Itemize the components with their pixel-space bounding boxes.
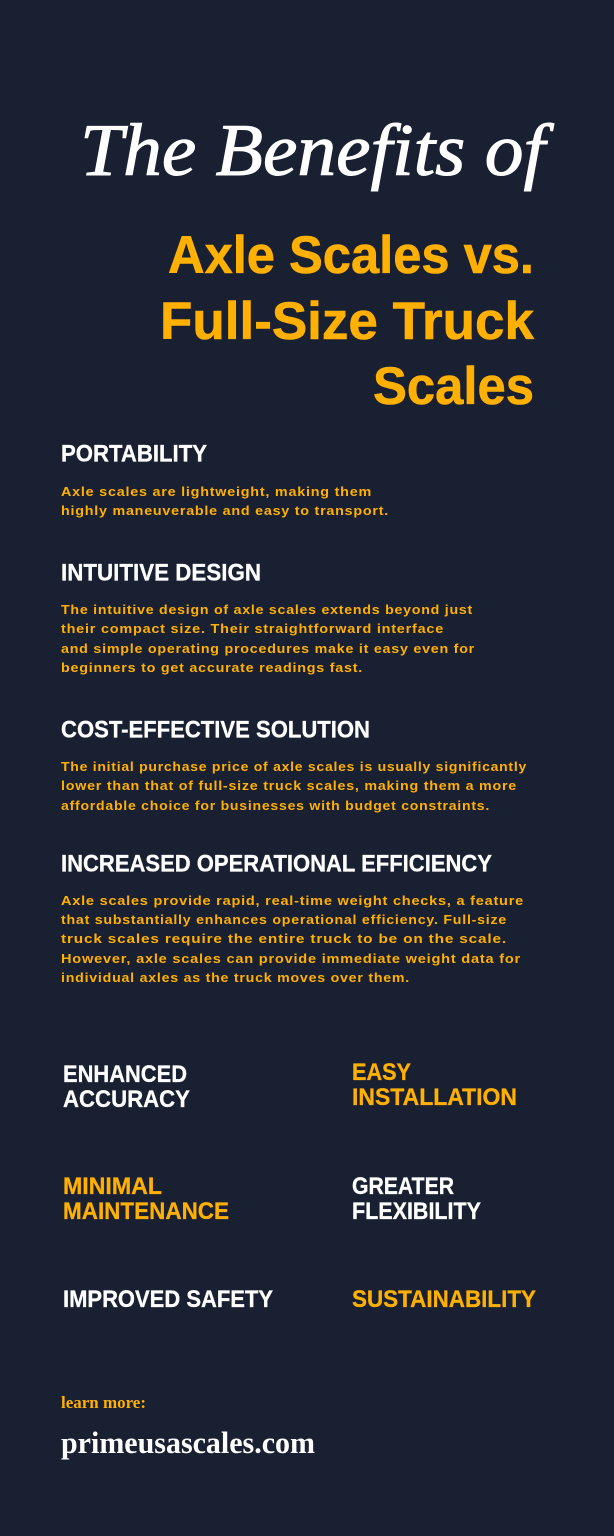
label: minimal maintenance: MAINTENANCE xyxy=(63,1198,229,1225)
text: intuitive design body: and simple operating procedures make it easy even for xyxy=(61,641,475,656)
label: easy installation: EASY xyxy=(352,1059,411,1086)
section: portability xyxy=(61,440,389,518)
label: minimal maintenance: MINIMAL xyxy=(63,1173,162,1200)
subtitle: Axle Scales vs. Full-Size Truck Scales: Scales xyxy=(373,357,534,416)
text: operational efficiency body: truck scales require the entire truck to be on the scale. xyxy=(61,931,507,946)
text: operational efficiency body: However, axle scales can provide immediate weight data for xyxy=(61,951,521,966)
text: operational efficiency body: Axle scales provide rapid, real-time weight checks, a feature xyxy=(61,893,524,908)
label: sustainability: SUSTAINABILITY xyxy=(352,1286,536,1313)
label: minimal maintenance xyxy=(63,1173,229,1225)
text: portability body: Axle scales are lightweight, making them xyxy=(61,484,372,499)
text: cost-effective body: affordable choice for businesses with budget constraints. xyxy=(61,798,490,813)
label: greater flexibility: FLEXIBILITY xyxy=(352,1198,481,1225)
text: operational efficiency body: individual axles as the truck moves over them. xyxy=(61,970,410,985)
text: operational efficiency body xyxy=(61,893,524,985)
text: intuitive design body: beginners to get accurate readings fast. xyxy=(61,660,363,675)
label: greater flexibility xyxy=(352,1173,481,1225)
label: greater flexibility: GREATER xyxy=(352,1173,454,1200)
label: enhanced accuracy: ENHANCED xyxy=(63,1061,187,1088)
label: easy installation xyxy=(352,1059,517,1111)
label: easy installation: INSTALLATION xyxy=(352,1084,517,1111)
text: operational efficiency body: that substantially enhances operational efficiency. Full-size xyxy=(61,912,507,927)
text: cost-effective body: The initial purchase price of axle scales is usually significantly xyxy=(61,759,527,774)
footer: learn more: learn more: xyxy=(61,1393,146,1412)
label: enhanced accuracy: ACCURACY xyxy=(63,1086,190,1113)
text: intuitive design body: their compact size. Their straightforward interface xyxy=(61,621,444,636)
subtitle: Axle Scales vs. Full-Size Truck Scales: Full-Size Truck xyxy=(160,292,535,351)
text: cost-effective body: lower than that of full-size truck scales, making them a more xyxy=(61,778,517,793)
subtitle: Axle Scales vs. Full-Size Truck Scales xyxy=(160,226,535,416)
section: cost-effective solution xyxy=(61,716,527,813)
subtitle: Axle Scales vs. Full-Size Truck Scales: Axle Scales vs. xyxy=(168,226,534,285)
title: The Benefits of: The Benefits of xyxy=(80,110,555,192)
text: portability body xyxy=(61,484,389,518)
text: portability body: highly maneuverable and easy to transport. xyxy=(61,503,389,518)
section: increased operational efficiency xyxy=(61,850,524,985)
section: intuitive design xyxy=(61,560,475,675)
label: enhanced accuracy xyxy=(63,1061,190,1113)
label: improved safety: IMPROVED SAFETY xyxy=(63,1286,273,1313)
text: intuitive design body xyxy=(61,602,475,675)
footer: website: primeusascales.com xyxy=(61,1425,315,1460)
heading: cost-effective solution: COST-EFFECTIVE SOLUTION xyxy=(61,716,370,744)
heading: portability: PORTABILITY xyxy=(61,440,207,468)
heading: increased operational efficiency: INCREASED OPERATIONAL EFFICIENCY xyxy=(61,850,492,878)
text: cost-effective body xyxy=(61,759,527,813)
heading: intuitive design: INTUITIVE DESIGN xyxy=(61,560,261,586)
text: intuitive design body: The intuitive design of axle scales extends beyond just xyxy=(61,602,473,617)
